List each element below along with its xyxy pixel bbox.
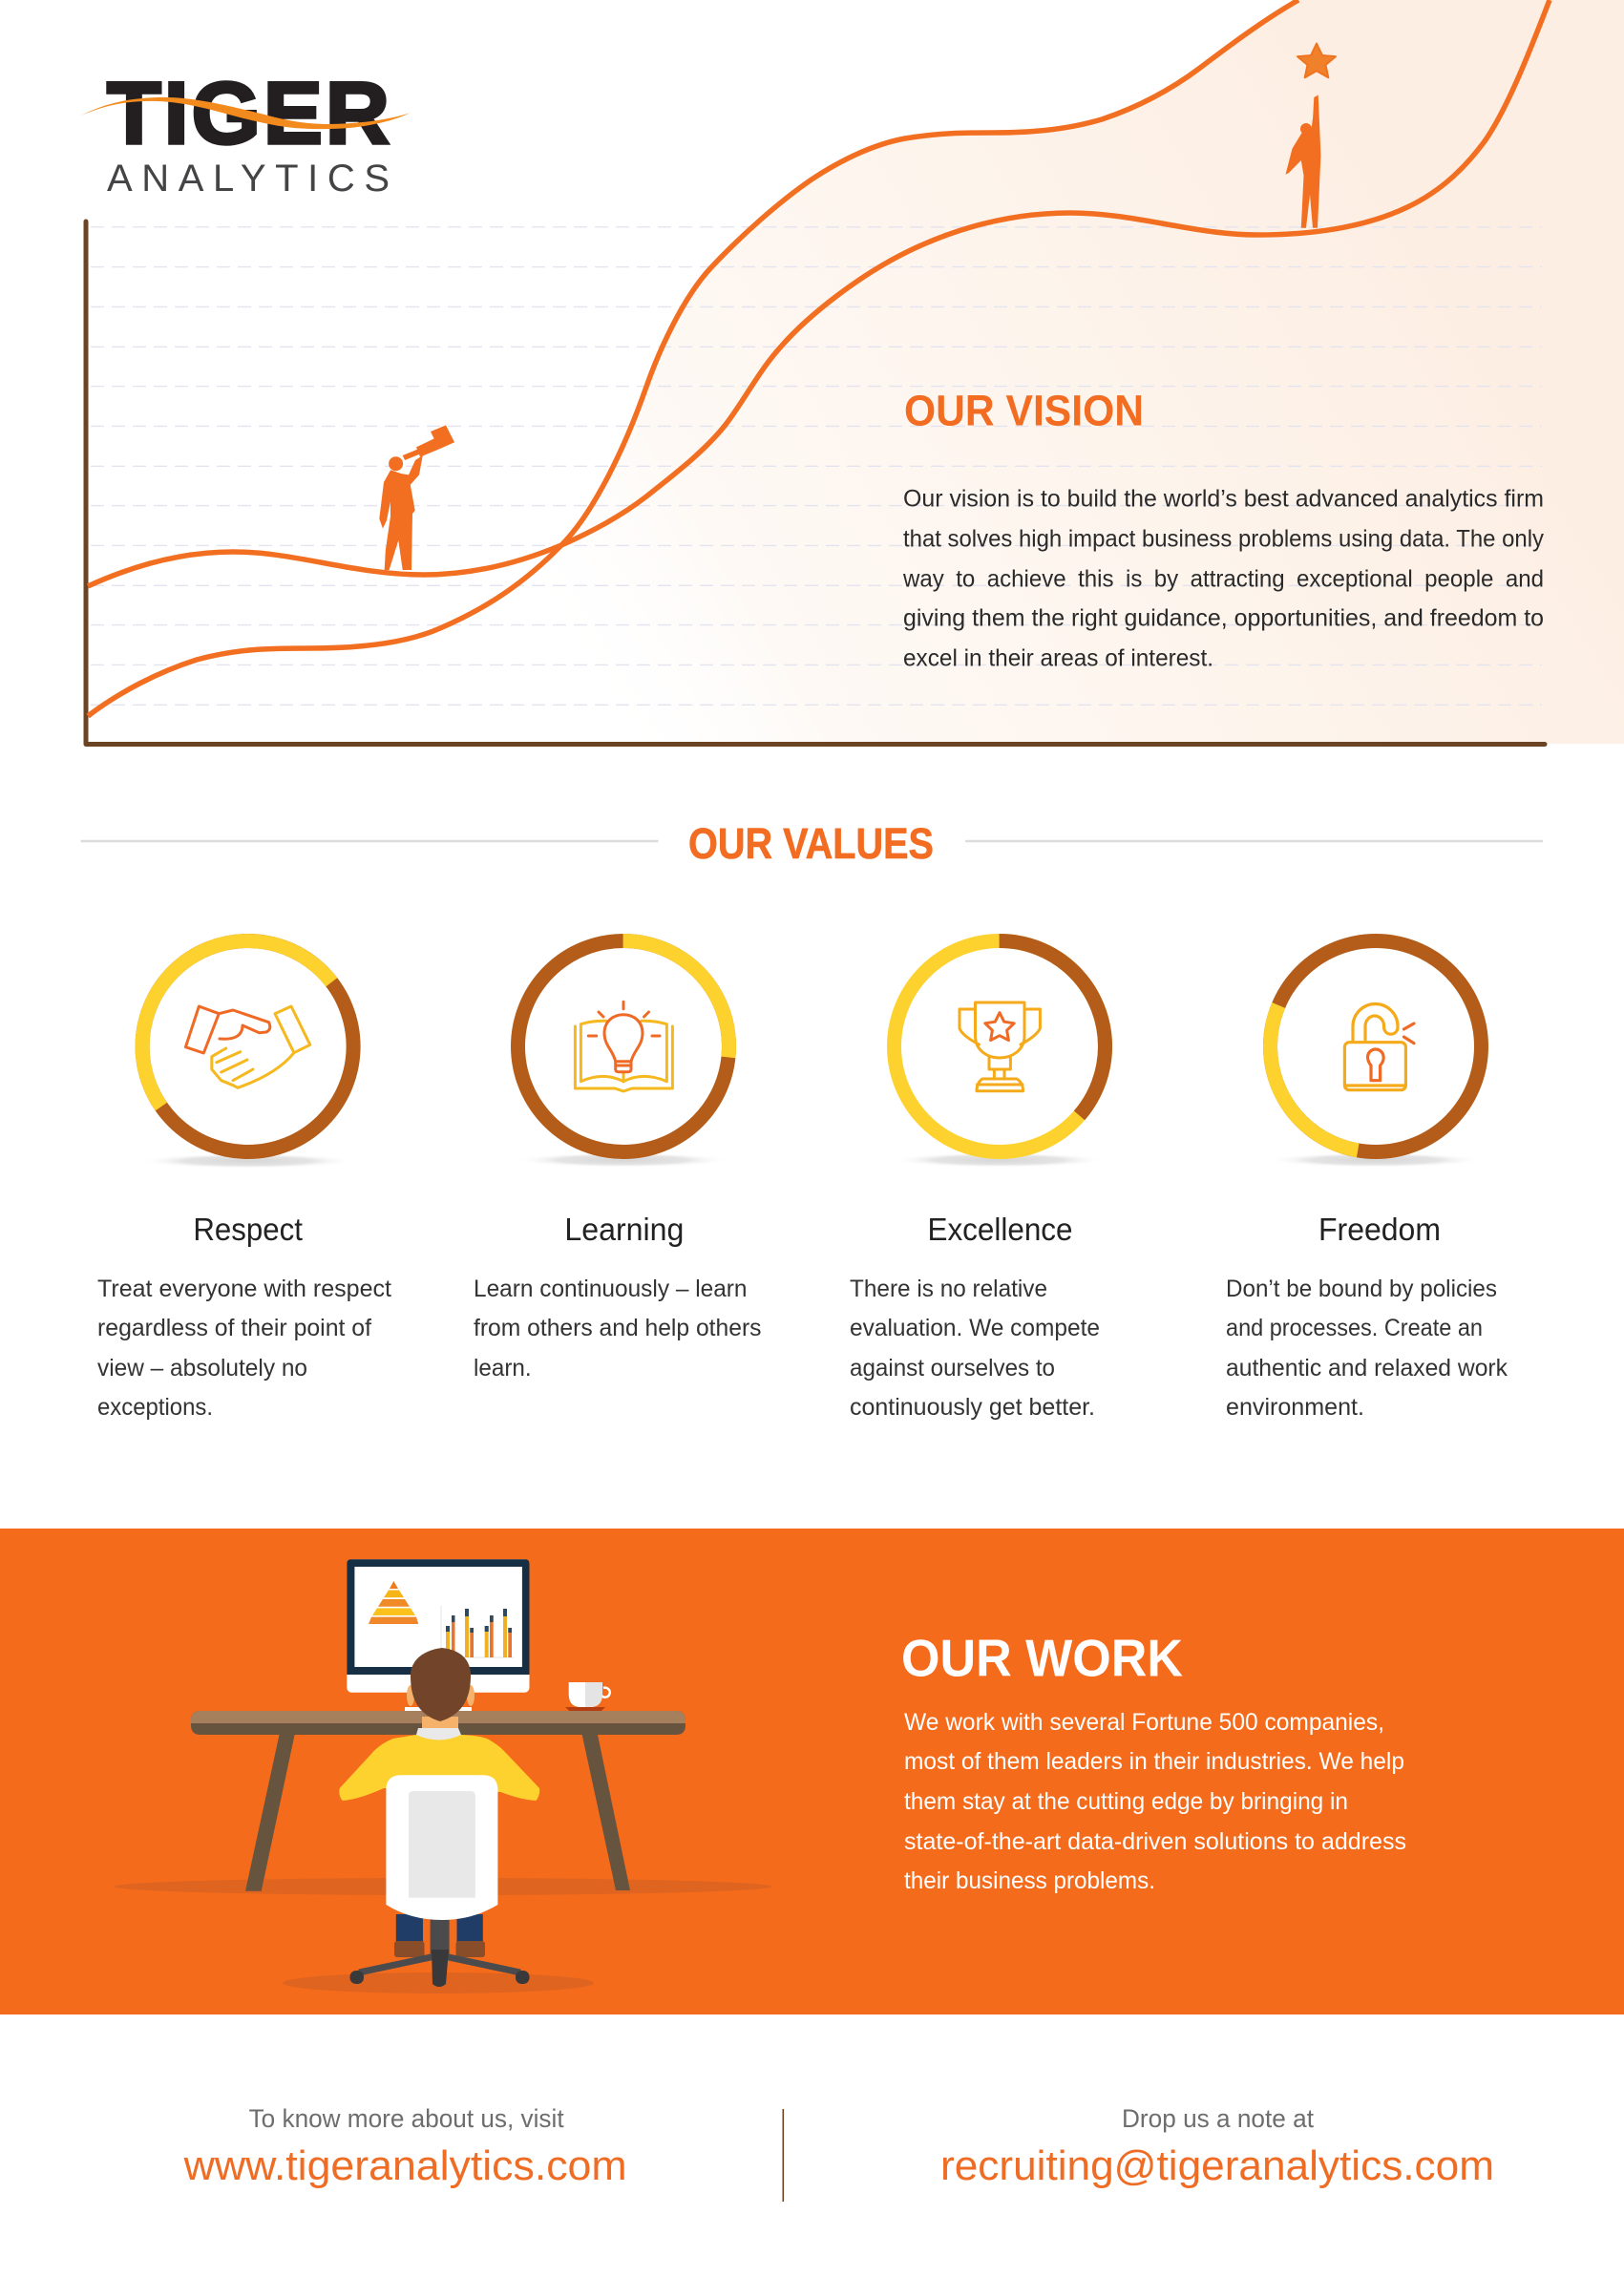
sweater: [339, 1735, 539, 1801]
text: freedom description: Don’t be bound by policies: [1226, 1276, 1497, 1302]
text: vision paragraph: that solves high impact business problems using data. The only: [903, 525, 1544, 552]
value: learning: [474, 941, 762, 1382]
office chair: [349, 1775, 529, 1987]
label: excellence: Excellence: [928, 1212, 1073, 1247]
coffee cup: [565, 1682, 610, 1712]
icon: star: [1297, 44, 1336, 77]
footer: email: [940, 2104, 1494, 2189]
icon: handshake: [185, 1006, 310, 1087]
chart gridlines: [91, 227, 1542, 705]
icon: trophy: [960, 1002, 1040, 1091]
ring shadow: [1268, 1152, 1482, 1168]
floor shadows: [115, 1878, 771, 1993]
text: work paragraph: [904, 1709, 1406, 1894]
text: respect description: view – absolutely no: [97, 1355, 307, 1382]
text: work paragraph: state-of-the-art data-driven solutions to address: [904, 1828, 1406, 1855]
text: learning description: Learn continuously – learn: [474, 1276, 747, 1302]
text: respect description: regardless of their point of: [97, 1315, 371, 1341]
logo wordmark TIGER: TIGER: [107, 65, 392, 162]
panel: our values: [80, 819, 1543, 1421]
text: work paragraph: We work with several Fortune 500 companies,: [904, 1709, 1384, 1736]
text: freedom description: environment.: [1226, 1394, 1364, 1421]
ring shadow: [140, 1153, 354, 1169]
text: excellence description: evaluation. We compete: [850, 1315, 1100, 1341]
ring: [101, 899, 394, 1193]
heading: our vision: OUR VISION: [904, 386, 1144, 435]
chart axes: [86, 221, 1545, 745]
text: freedom description: [1226, 1276, 1508, 1421]
text: vision paragraph: giving them the right guidance, opportunities, and freedom to: [903, 605, 1544, 632]
footer: website: www.tigeranalytics.com: [183, 2142, 627, 2189]
logo wordmark ANALYTICS: ANALYTICS: [107, 158, 390, 200]
text: learning description: from others and help others: [474, 1315, 762, 1341]
text: vision paragraph: way to achieve this is by attracting exceptional people and: [902, 565, 1544, 592]
screen chart: pyramid: [369, 1581, 418, 1624]
value: respect: [97, 899, 394, 1421]
curve: lower path: [88, 0, 1550, 586]
footer: website: To know more about us, visit: [249, 2104, 564, 2133]
heading: our work: OUR WORK: [901, 1629, 1183, 1688]
footer: email: Drop us a note at: [1122, 2104, 1314, 2133]
footer: [183, 2104, 1494, 2202]
text: freedom description: and processes. Create an: [1226, 1315, 1483, 1341]
logo: [81, 65, 411, 200]
collar: [416, 1728, 461, 1740]
text: work paragraph: most of them leaders in their industries. We help: [904, 1748, 1404, 1775]
text: excellence description: continuously get better.: [850, 1394, 1095, 1421]
ring: [1254, 924, 1498, 1169]
label: learning: Learning: [564, 1212, 684, 1247]
heading: our values: OUR VALUES: [688, 819, 934, 868]
text: excellence description: against ourselves to: [850, 1355, 1055, 1382]
jeans and shoes: [394, 1914, 485, 1957]
ring: [894, 941, 1106, 1151]
label: respect: Respect: [193, 1212, 303, 1247]
text: learning description: [474, 1276, 762, 1382]
text: learning description: learn.: [474, 1355, 532, 1382]
icon: man with telescope: [379, 425, 454, 570]
orange band: [0, 1529, 1624, 2014]
text: work paragraph: their business problems.: [904, 1867, 1155, 1894]
text: work paragraph: them stay at the cutting edge by bringing in: [904, 1788, 1348, 1815]
label: freedom: Freedom: [1318, 1212, 1441, 1247]
value: excellence: [850, 941, 1106, 1421]
ring shadow: [516, 1152, 729, 1168]
panel: our work: [0, 1529, 1624, 2014]
text: excellence description: [850, 1276, 1100, 1421]
hair: [411, 1648, 471, 1721]
icon: man reaching for star: [1285, 95, 1320, 228]
text: respect description: Treat everyone with respect: [97, 1276, 391, 1302]
curve: upper path: [88, 0, 1298, 716]
text: excellence description: There is no relative: [850, 1276, 1047, 1302]
ring shadow: [892, 1152, 1106, 1168]
footer: website: [183, 2104, 627, 2189]
logo swoosh: [81, 97, 411, 129]
value: freedom: [1226, 924, 1508, 1421]
ears and neck: [407, 1685, 475, 1732]
text: respect description: [97, 1276, 391, 1421]
text: vision paragraph: [902, 486, 1544, 671]
screen chart: bars: [441, 1606, 514, 1657]
text: freedom description: authentic and relaxed work: [1226, 1355, 1508, 1382]
person: [339, 1648, 539, 1957]
ring: [517, 941, 729, 1151]
footer divider: [783, 2109, 784, 2202]
chart background: peach gradient area: [310, 0, 1624, 744]
vision chart: [86, 0, 1550, 745]
text: respect description: exceptions.: [97, 1394, 213, 1421]
monitor: [347, 1559, 529, 1712]
icon: book with light bulb: [575, 1002, 672, 1091]
desk: [191, 1711, 685, 1891]
icon: open padlock: [1344, 1004, 1414, 1090]
text: vision paragraph: excel in their areas of interest.: [903, 644, 1213, 671]
illustration: person at desk: [115, 1559, 771, 1993]
footer: email: recruiting@tigeranalytics.com: [940, 2142, 1494, 2189]
text: vision paragraph: Our vision is to build the world’s best advanced analytics firm: [903, 486, 1544, 513]
